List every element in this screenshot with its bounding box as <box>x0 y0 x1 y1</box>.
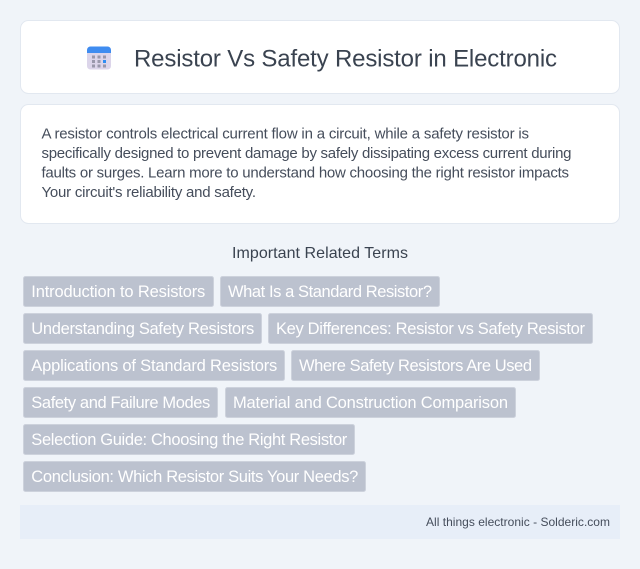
tag: introduction: Introduction to Resistors <box>31 283 205 301</box>
tag: selection guide <box>24 424 354 454</box>
footer text: All things electronic - Solderic.com <box>426 515 610 529</box>
tag group: related terms <box>24 276 592 492</box>
tag: conclusion: Conclusion: Which Resistor Suits Your Needs? <box>31 468 358 486</box>
footer <box>20 505 620 539</box>
tag: where used: Where Safety Resistors Are Used <box>299 357 532 375</box>
tag: applications: Applications of Standard Resistors <box>31 357 277 375</box>
tag: safety resistors: Understanding Safety Resistors <box>31 320 254 338</box>
tag: material comparison <box>226 388 516 418</box>
text: summary paragraph: A resistor controls electrical current flow in a circuit, while a safety resistor is <box>42 126 529 142</box>
tag: selection guide: Selection Guide: Choosing the Right Resistor <box>31 431 348 449</box>
text: summary paragraph <box>42 126 572 201</box>
tag: where used <box>292 350 540 380</box>
tag: key differences <box>268 314 592 344</box>
tag: introduction <box>24 276 214 306</box>
icon: calendar <box>87 46 111 70</box>
tag: conclusion <box>24 462 366 492</box>
tag: key differences: Key Differences: Resistor vs Safety Resistor <box>276 320 586 338</box>
tag: safety resistors <box>24 314 262 344</box>
text: summary paragraph: Your circuit's reliability and safety. <box>42 184 256 201</box>
tag: material comparison: Material and Construction Comparison <box>233 394 508 412</box>
panel: header <box>20 20 620 94</box>
tag: applications <box>24 350 284 380</box>
heading: related terms: Important Related Terms <box>232 245 408 262</box>
title: Resistor Vs Safety Resistor in Electronic <box>134 46 557 72</box>
tag: standard resistor: What Is a Standard Resistor? <box>228 283 432 301</box>
panel: summary <box>20 104 620 224</box>
tag: standard resistor <box>220 276 440 306</box>
tag: failure modes: Safety and Failure Modes <box>31 394 210 412</box>
text: summary paragraph: specifically designed to prevent damage by safely dissipating excess current during <box>42 145 572 162</box>
tag: failure modes <box>24 388 218 418</box>
text: summary paragraph: faults or surges. Learn more to understand how choosing the right resistor impacts <box>42 164 569 182</box>
